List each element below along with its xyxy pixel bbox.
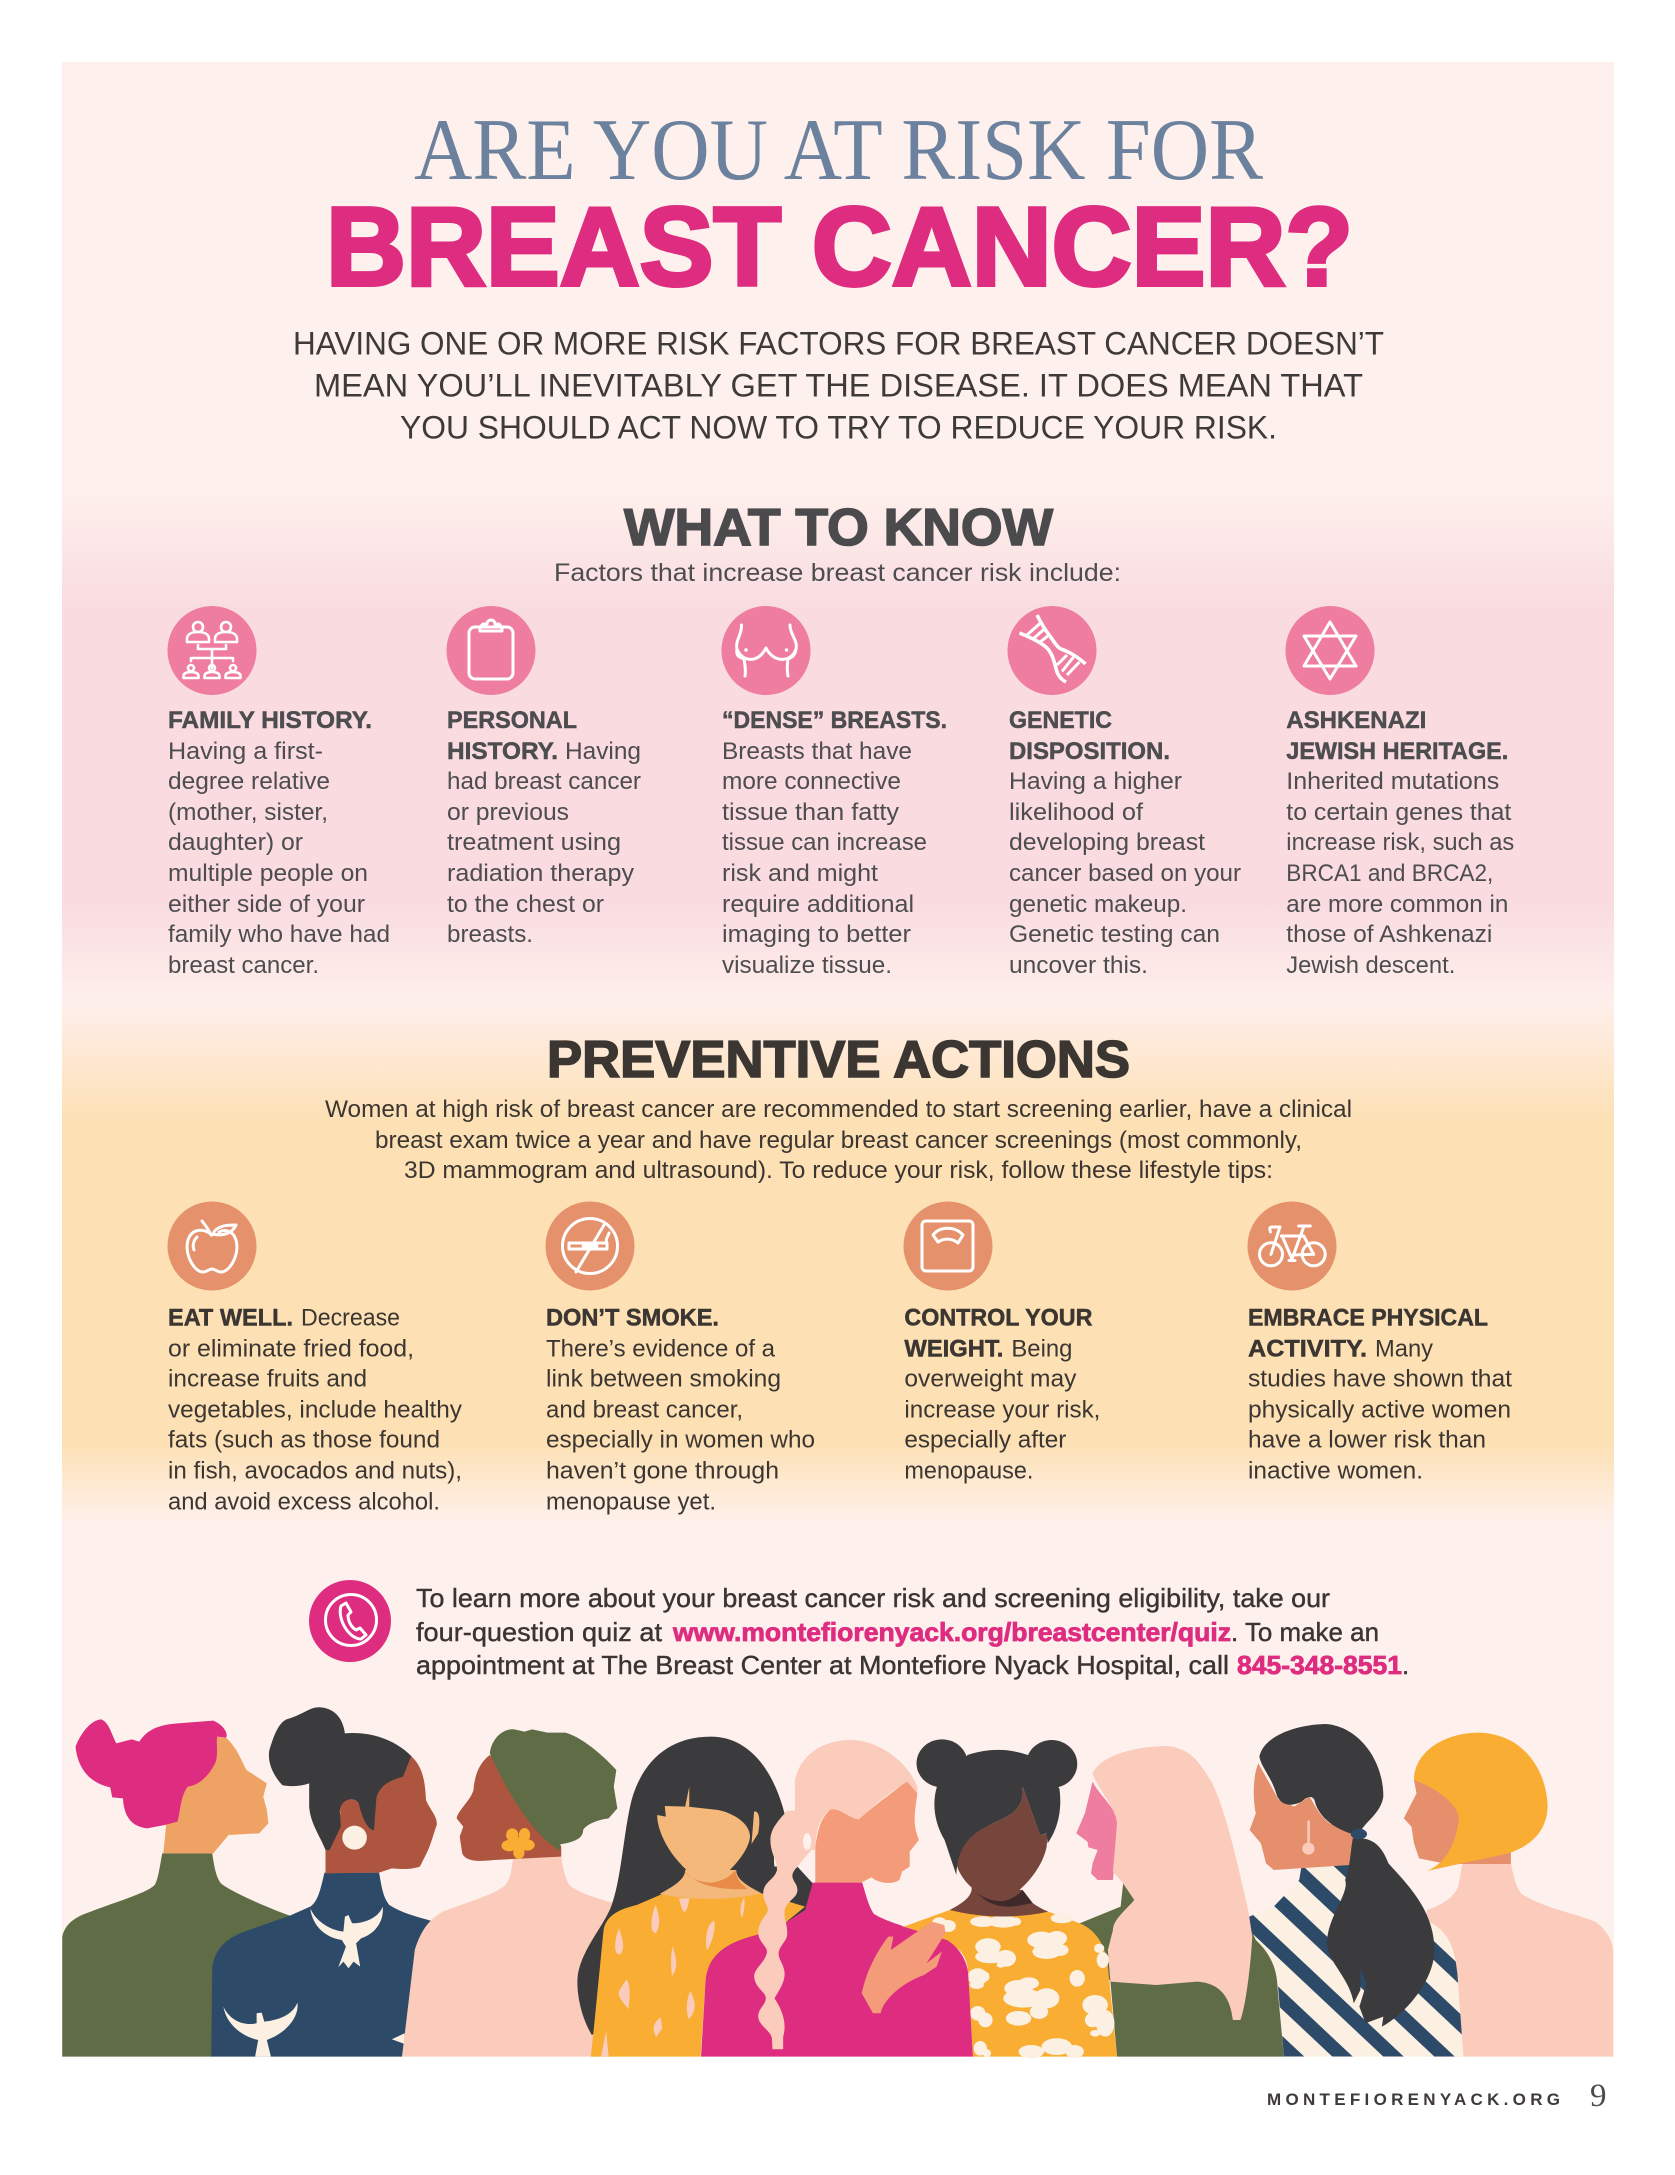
text: family history: daughter) or [168, 829, 303, 856]
figure: woman with long pale hair [1076, 1746, 1284, 2057]
text: dense breasts [722, 707, 947, 979]
figure: woman with buns in floral yellow [904, 1739, 1117, 2058]
call to action text: To learn more about your breast cancer risk and screening eligibility, take our [416, 1583, 1330, 1613]
text: dense breasts: Breasts that have [722, 738, 912, 765]
text: dense breasts: risk and might [722, 860, 878, 887]
text: dense breasts: “DENSE” BREASTS. [722, 707, 947, 734]
text: genetic disposition [1009, 707, 1241, 979]
text: dont smoke [546, 1304, 815, 1515]
text: genetic disposition: GENETIC [1009, 707, 1112, 734]
text: family history: degree relative [168, 768, 330, 795]
text: control your weight: increase your risk, [904, 1396, 1100, 1423]
text: control your weight: Being [1011, 1335, 1072, 1362]
text: genetic disposition: cancer based on your [1009, 860, 1241, 887]
text: dont smoke: especially in women who [546, 1426, 815, 1453]
text: family history: (mother, sister, [168, 799, 328, 826]
heading: preventive actions: PREVENTIVE ACTIONS [547, 1031, 1130, 1089]
text: personal history: or previous [447, 799, 569, 826]
text: ashkenazi jewish heritage: ASHKENAZI [1286, 707, 1426, 734]
text: ashkenazi jewish heritage [1286, 707, 1514, 979]
panel: dont smoke [546, 1202, 815, 1515]
text: ashkenazi jewish heritage: are more common in [1286, 891, 1508, 918]
panel: control your weight [904, 1202, 1100, 1484]
figure: woman with magenta hair [62, 1719, 290, 2057]
text: control your weight: CONTROL YOUR [904, 1304, 1092, 1331]
text: dont smoke: and breast cancer, [546, 1396, 743, 1423]
text: preventive intro: Women at high risk of breast cancer are recommended to start screening earlier, have a clinical [325, 1096, 1352, 1123]
text: family history: breast cancer. [168, 952, 319, 979]
intro text: MEAN YOU’LL INEVITABLY GET THE DISEASE. IT DOES MEAN THAT [314, 368, 1363, 404]
icon: breasts [722, 606, 810, 695]
text: genetic disposition: DISPOSITION. [1009, 738, 1170, 765]
text: embrace physical activity: have a lower risk than [1248, 1426, 1486, 1453]
text: ashkenazi jewish heritage: Jewish descent. [1286, 952, 1455, 979]
text: control your weight: overweight may [904, 1365, 1076, 1392]
text: personal history: treatment using [447, 829, 621, 856]
icon: family tree [168, 606, 256, 695]
figure: woman with orange bob [1404, 1733, 1613, 2057]
text: ashkenazi jewish heritage: JEWISH HERITAGE. [1286, 738, 1508, 765]
text: dense breasts: visualize tissue. [722, 952, 892, 979]
intro text [293, 326, 1384, 446]
illustration: group of women [62, 1707, 1613, 2058]
text: genetic disposition: Genetic testing can [1009, 921, 1220, 948]
text: embrace physical activity: ACTIVITY. [1248, 1335, 1367, 1362]
panel: embrace physical activity [1248, 1202, 1512, 1484]
text: dont smoke: haven’t gone through [546, 1457, 779, 1484]
text: dont smoke: link between smoking [546, 1365, 781, 1392]
text: dont smoke: There’s evidence of a [546, 1335, 776, 1362]
figure: woman in navy with birds [211, 1707, 437, 2057]
text: ashkenazi jewish heritage: increase risk, such as [1286, 829, 1514, 856]
text: ashkenazi jewish heritage: Inherited mutations [1286, 768, 1499, 795]
text: family history: either side of your [168, 891, 365, 918]
icon: dna [1008, 606, 1096, 695]
text: personal history: radiation therapy [447, 860, 634, 887]
text: family history: multiple people on [168, 860, 368, 887]
text: embrace physical activity: inactive women. [1248, 1457, 1423, 1484]
text: genetic disposition: Having a higher [1009, 768, 1182, 795]
title [326, 102, 1353, 309]
intro text: YOU SHOULD ACT NOW TO TRY TO REDUCE YOUR RISK. [400, 410, 1277, 446]
text: embrace physical activity [1248, 1304, 1512, 1484]
text: preventive intro: 3D mammogram and ultrasound). To reduce your risk, follow these lifestyle tips: [404, 1157, 1273, 1184]
panel: eat well [168, 1202, 462, 1515]
panel: genetic disposition [1008, 606, 1241, 979]
figure: woman with pale braid in magenta [701, 1740, 973, 2057]
text: eat well [168, 1304, 462, 1515]
text: embrace physical activity: physically active women [1248, 1396, 1511, 1423]
text: ashkenazi jewish heritage: those of Ashkenazi [1286, 921, 1492, 948]
text: eat well: vegetables, include healthy [168, 1396, 462, 1423]
text: eat well: or eliminate fried food, [168, 1335, 414, 1362]
text: dense breasts: tissue than fatty [722, 799, 899, 826]
text: dense breasts: imaging to better [722, 921, 911, 948]
text: control your weight: WEIGHT. [904, 1335, 1003, 1362]
call to action text: four-question quiz at [416, 1617, 663, 1647]
text: embrace physical activity: Many [1375, 1335, 1433, 1362]
text: personal history [447, 707, 641, 948]
call to action text: appointment at The Breast Center at Montefiore Nyack Hospital, call [416, 1650, 1229, 1680]
text: control your weight: menopause. [904, 1457, 1033, 1484]
text: dont smoke: menopause yet. [546, 1488, 716, 1515]
footer: page number: 9 [1590, 2078, 1606, 2114]
text: ashkenazi jewish heritage: BRCA1 and BRCA2, [1286, 860, 1493, 887]
panel: dense breasts [722, 606, 947, 979]
text: preventive intro: breast exam twice a year and have regular breast cancer screenings (most commonly, [375, 1127, 1302, 1154]
text: dense breasts: tissue can increase [722, 829, 927, 856]
text: eat well: increase fruits and [168, 1365, 367, 1392]
text: personal history: to the chest or [447, 891, 604, 918]
text: dense breasts: more connective [722, 768, 901, 795]
icon: scale [904, 1202, 992, 1290]
text: family history [168, 707, 390, 979]
text: eat well: and avoid excess alcohol. [168, 1488, 440, 1515]
text: family history: family who have had [168, 921, 390, 948]
panel: family history [168, 606, 390, 979]
text: dont smoke: DON’T SMOKE. [546, 1304, 719, 1331]
text: control your weight [904, 1304, 1100, 1484]
icon: bicycle [1248, 1202, 1336, 1290]
text: genetic disposition: uncover this. [1009, 952, 1148, 979]
heading: what to know: WHAT TO KNOW [624, 499, 1054, 557]
call to action text: 845-348-8551 [1237, 1650, 1402, 1680]
text: genetic disposition: likelihood of [1009, 799, 1143, 826]
text: personal history: had breast cancer [447, 768, 641, 795]
icon: clipboard [446, 606, 536, 695]
text: personal history: HISTORY. [447, 738, 558, 765]
figure: woman with green headwrap [402, 1729, 617, 2057]
text: genetic disposition: developing breast [1009, 829, 1205, 856]
text: family history: Having a first- [168, 738, 323, 765]
footer: website: MONTEFIORENYACK.ORG [1267, 2090, 1563, 2109]
icon: phone [309, 1580, 391, 1662]
panel: personal history [446, 606, 641, 948]
text: personal history: Having [565, 738, 641, 765]
intro text: HAVING ONE OR MORE RISK FACTORS FOR BREAST CANCER DOESN’T [293, 326, 1384, 362]
text: genetic disposition: genetic makeup. [1009, 891, 1187, 918]
subheading: factors: Factors that increase breast cancer risk include: [554, 559, 1121, 587]
text: personal history: PERSONAL [447, 707, 577, 734]
title: ARE YOU AT RISK FOR [414, 102, 1263, 199]
call to action text: www.montefiorenyack.org/breastcenter/quiz [672, 1617, 1231, 1647]
title: BREAST CANCER? [326, 185, 1353, 309]
call to action text: . To make an [1231, 1617, 1379, 1647]
text: preventive intro [325, 1096, 1352, 1184]
text: dense breasts: require additional [722, 891, 914, 918]
text: embrace physical activity: EMBRACE PHYSICAL [1248, 1304, 1488, 1331]
text: eat well: fats (such as those found [168, 1426, 440, 1453]
call to action text [416, 1583, 1409, 1680]
figure: woman with long dark hair in yellow [577, 1737, 813, 2057]
text: eat well: EAT WELL. [168, 1304, 293, 1331]
text: family history: FAMILY HISTORY. [168, 707, 372, 734]
icon: apple [168, 1202, 256, 1290]
text: control your weight: especially after [904, 1426, 1066, 1453]
text: ashkenazi jewish heritage: to certain genes that [1286, 799, 1512, 826]
text: eat well: Decrease [301, 1304, 400, 1331]
panel: ashkenazi jewish heritage [1286, 606, 1514, 979]
text: personal history: breasts. [447, 921, 533, 948]
text: embrace physical activity: studies have shown that [1248, 1365, 1512, 1392]
figure: woman with ponytail in striped top [1249, 1724, 1464, 2057]
icon: star of david [1286, 606, 1374, 695]
icon: no smoking [546, 1202, 634, 1290]
text: eat well: in fish, avocados and nuts), [168, 1457, 462, 1484]
call to action text: . [1402, 1650, 1409, 1680]
